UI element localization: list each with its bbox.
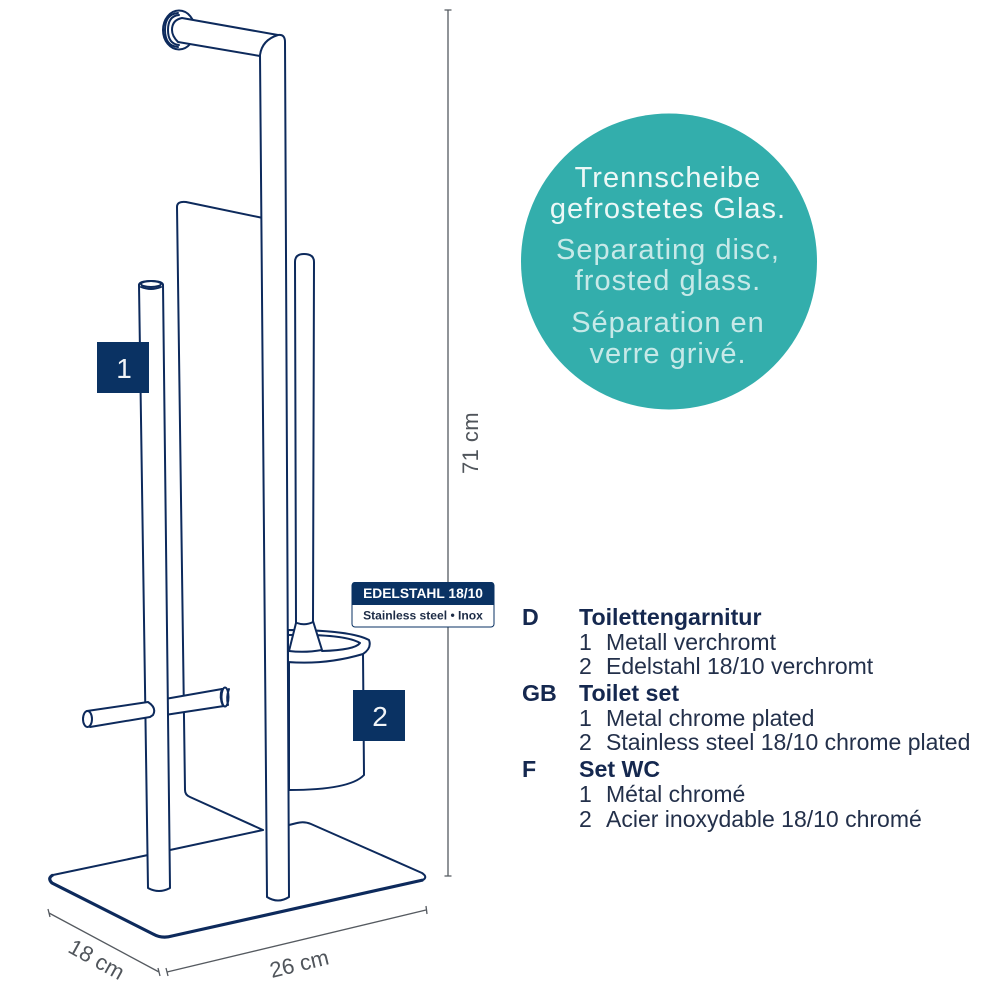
legend: German: 2 bbox=[579, 653, 592, 679]
legend: German bbox=[522, 604, 874, 679]
label box 2 bbox=[353, 690, 405, 741]
cross arm: rear bbox=[165, 688, 229, 715]
callout text: English: Separating disc, bbox=[556, 234, 780, 266]
legend: French: F bbox=[522, 756, 536, 782]
brush handle bbox=[289, 254, 322, 652]
callout text: German: Trennscheibe bbox=[575, 162, 761, 194]
callout text: French: verre grivé. bbox=[589, 338, 747, 370]
legend: German: Metall verchromt bbox=[606, 629, 777, 655]
label box 1: 1 bbox=[116, 353, 132, 384]
main pole bbox=[260, 35, 289, 900]
legend: English: Stainless steel 18/10 chrome plated bbox=[606, 729, 970, 755]
paper holder arm and main pole bbox=[163, 10, 289, 900]
wall flange rings bbox=[163, 10, 195, 50]
dimension: width 26 cm bbox=[166, 906, 427, 983]
callout text: German: gefrostetes Glas. bbox=[550, 193, 786, 225]
legend: French: 2 bbox=[579, 806, 592, 832]
brush bowl bbox=[288, 630, 370, 790]
cross arm: front bbox=[83, 702, 154, 727]
dimension: height 71 cm bbox=[444, 10, 483, 876]
teal callout circle bbox=[521, 114, 817, 410]
dimension: depth 18 cm: 18 cm bbox=[64, 934, 129, 984]
stainless steel badge bbox=[352, 582, 494, 627]
callout text: French: Séparation en bbox=[571, 307, 765, 339]
legend: English: 1 bbox=[579, 705, 592, 731]
dimension: width 26 cm: 26 cm bbox=[267, 945, 331, 983]
callout text: English bbox=[556, 234, 780, 297]
legend: German: D bbox=[522, 604, 539, 630]
base plate bbox=[50, 822, 425, 937]
label box 2: 2 bbox=[372, 701, 388, 732]
legend: German: Toilettengarnitur bbox=[579, 604, 762, 630]
label box 1 bbox=[97, 342, 149, 393]
legend: German: Edelstahl 18/10 verchromt bbox=[606, 653, 874, 679]
dimension: height 71 cm: 71 cm bbox=[458, 412, 483, 474]
legend: French bbox=[522, 756, 922, 832]
stainless steel badge: Stainless steel • Inox bbox=[363, 608, 483, 622]
legend: French: Métal chromé bbox=[606, 781, 745, 807]
holder arm bbox=[172, 18, 278, 56]
legend: French: Acier inoxydable 18/10 chromé bbox=[606, 806, 922, 832]
callout text: German bbox=[550, 162, 786, 225]
legend: English bbox=[522, 680, 970, 755]
legend: English: Metal chrome plated bbox=[606, 705, 814, 731]
stainless steel badge: EDELSTAHL 18/10 bbox=[363, 586, 483, 601]
legend: English: Toilet set bbox=[579, 680, 679, 706]
callout text: English: frosted glass. bbox=[575, 265, 761, 297]
legend: English: 2 bbox=[579, 729, 592, 755]
legend: materials in three languages bbox=[522, 604, 970, 832]
legend: French: Set WC bbox=[579, 756, 660, 782]
left pole bbox=[139, 281, 170, 891]
legend: French: 1 bbox=[579, 781, 592, 807]
callout text: French bbox=[571, 307, 765, 370]
product illustration: toilet set bbox=[50, 10, 425, 937]
dimension: depth 18 cm bbox=[48, 909, 160, 984]
frosted glass panel bbox=[177, 202, 263, 830]
legend: English: GB bbox=[522, 680, 557, 706]
legend: German: 1 bbox=[579, 629, 592, 655]
